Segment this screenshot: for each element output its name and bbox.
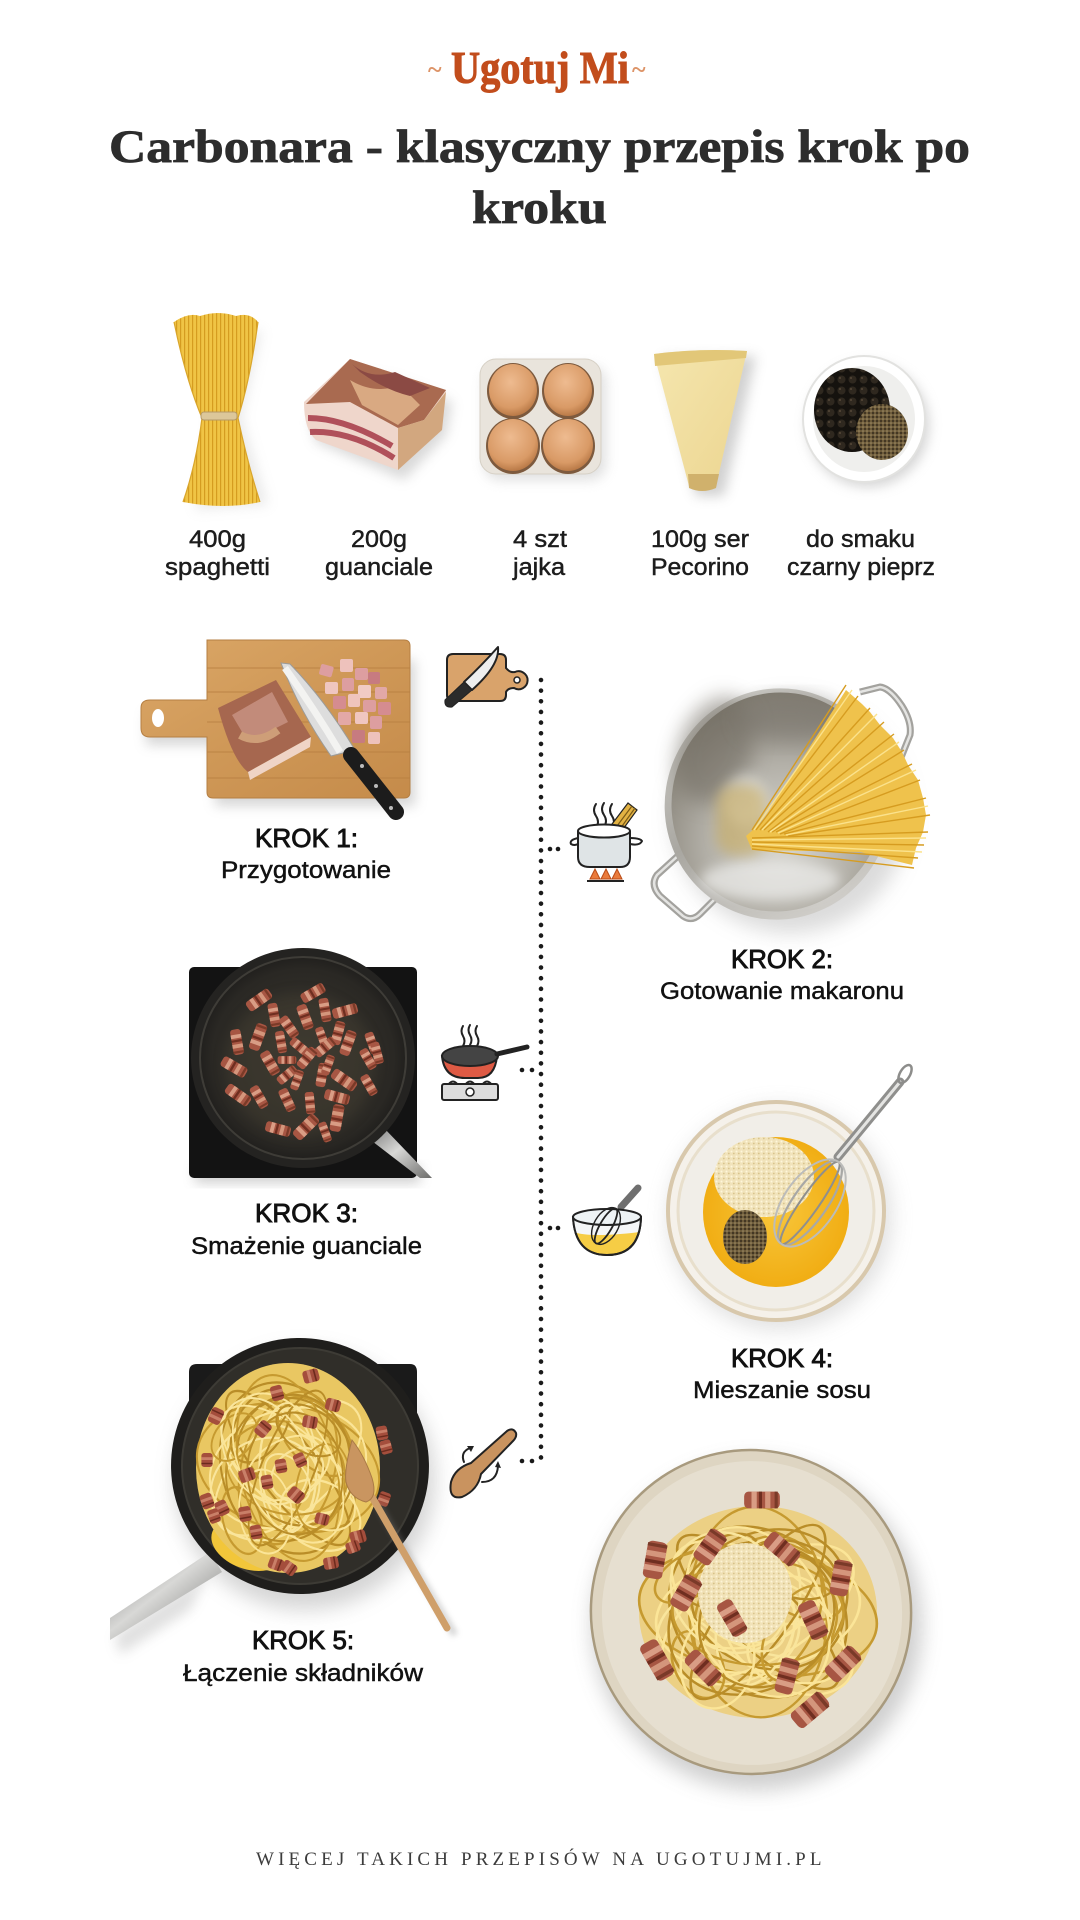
- photo: glass bowl with eggs and whisk: [668, 1063, 914, 1330]
- icon: boiling pot: [571, 803, 642, 881]
- label: KROK 4: KROK 4:: [731, 1343, 833, 1373]
- ingredient: eggs: [480, 359, 606, 480]
- panel: ingredients: [165, 313, 935, 581]
- ingredient: Pecorino cheese: [654, 350, 756, 496]
- photo: finished carbonara plate: [561, 1420, 941, 1804]
- icon: whisk in bowl: [573, 1188, 641, 1255]
- ingredient labels: 4 szt: [513, 526, 567, 553]
- pasta tangle: [171, 1341, 405, 1595]
- ingredient labels: jajka: [512, 554, 566, 581]
- ingredient labels: 400g: [189, 526, 246, 553]
- icon: board and knife: [445, 647, 528, 707]
- bacon pieces: [219, 982, 384, 1143]
- wooden spoon: [346, 1440, 455, 1635]
- label: KROK 2: Gotowanie makaronu: [660, 978, 904, 1005]
- icon: pan on stove: [442, 1025, 527, 1100]
- label: KROK 4: [693, 1343, 871, 1404]
- ingredient labels: 100g ser: [651, 526, 749, 553]
- ingredient labels: guanciale: [325, 554, 433, 581]
- label: KROK 4: Mieszanie sosu: [693, 1377, 871, 1404]
- bacon pieces: [638, 1492, 863, 1730]
- panel: step 2: [571, 656, 930, 1005]
- photo: pan with pasta and wooden spoon: [110, 1318, 455, 1655]
- logo: Ugotuj Mi: Ugotuj Mi: [451, 42, 629, 93]
- photo: cutting board: [141, 640, 415, 812]
- logo: Ugotuj Mi: ~: [632, 55, 646, 84]
- photo: pot with spaghetti: [632, 656, 930, 952]
- label: KROK 5: [183, 1625, 424, 1687]
- pasta nest: [608, 1469, 908, 1755]
- whisk: [760, 1063, 914, 1259]
- ingredient labels: spaghetti: [165, 554, 270, 581]
- label: KROK 1: KROK 1:: [255, 823, 358, 853]
- label: KROK 5: Łączenie składników: [183, 1660, 424, 1687]
- spaghetti bundle in pot: [746, 685, 930, 868]
- panel: step 1: [141, 640, 528, 884]
- ingredient labels: czarny pieprz: [787, 554, 935, 581]
- ingredient labels: do smaku: [806, 526, 915, 553]
- panel: step 4: [573, 1063, 914, 1404]
- panel: step 3: [189, 948, 527, 1260]
- label: KROK 3: [191, 1198, 422, 1260]
- ingredient: guanciale: [304, 359, 452, 480]
- label: KROK 1: Przygotowanie: [221, 857, 391, 884]
- panel: step 5: [110, 1318, 516, 1687]
- bacon cubes: [199, 1368, 393, 1577]
- label: KROK 2: KROK 2:: [731, 944, 833, 974]
- label: KROK 3: Smażenie guanciale: [191, 1233, 422, 1260]
- footer: WIĘCEJ TAKICH PRZEPISÓW NA UGOTUJMI.PL: [256, 1848, 824, 1870]
- ingredient labels: [165, 526, 935, 581]
- photo: frying pan with guanciale: [189, 948, 432, 1183]
- label: KROK 2: [660, 944, 904, 1005]
- ingredient labels: 200g: [351, 526, 407, 553]
- ingredient labels: Pecorino: [651, 554, 749, 581]
- logo: Ugotuj Mi: ~: [428, 55, 442, 84]
- ingredient: spaghetti: [174, 313, 268, 510]
- title: [109, 121, 970, 234]
- label: KROK 1: [221, 823, 391, 884]
- label: KROK 5: KROK 5:: [252, 1625, 354, 1655]
- ingredient: black pepper bowl: [803, 356, 929, 487]
- timeline: dotted connector: [520, 680, 560, 1463]
- label: KROK 3: KROK 3:: [255, 1198, 358, 1228]
- title: kroku: [472, 182, 607, 234]
- knife: [281, 663, 396, 812]
- title: Carbonara - klasyczny przepis krok po: [109, 121, 970, 173]
- diced guanciale: [319, 659, 391, 744]
- icon: spoon stirring: [450, 1429, 516, 1497]
